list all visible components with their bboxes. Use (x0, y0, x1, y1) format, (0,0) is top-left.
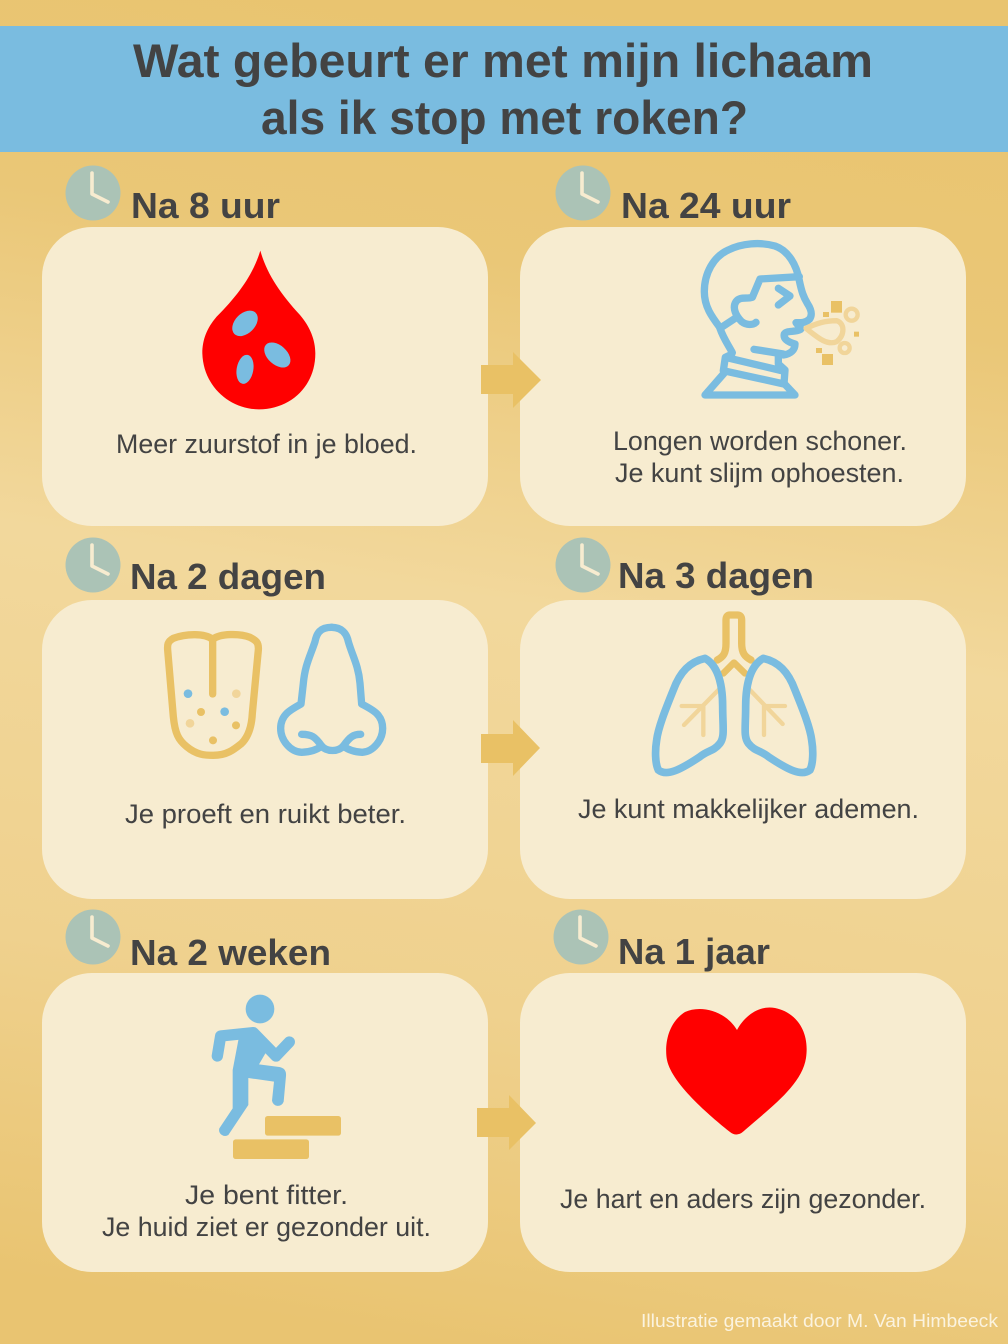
card (42, 227, 488, 526)
icon: head coughing (704, 244, 859, 395)
clock icon (66, 538, 120, 592)
panel: na 2 dagen (42, 538, 488, 899)
text: Meer zuurstof in je bloed. (116, 429, 417, 459)
text (613, 426, 907, 488)
heading: Na 2 weken (130, 932, 331, 973)
card (520, 600, 966, 899)
panel: na 8 uur (42, 166, 488, 526)
text: Je proeft en ruikt beter. (125, 799, 406, 829)
clock icon (66, 166, 120, 220)
title banner (0, 26, 1008, 152)
card (42, 600, 488, 899)
text: Je bent fitter. (185, 1180, 348, 1210)
card (520, 973, 966, 1272)
text: Je kunt slijm ophoesten. (615, 458, 904, 488)
panel: na 3 dagen (520, 538, 966, 899)
heading: Na 24 uur (621, 185, 791, 226)
arrow 2 (481, 720, 540, 776)
panel: na 24 uur (520, 166, 966, 526)
card (520, 227, 966, 526)
text: Je kunt makkelijker ademen. (578, 794, 919, 824)
arrow 3 (477, 1095, 536, 1150)
panel: na 2 weken (42, 910, 488, 1272)
icon: tongue (168, 635, 258, 755)
panel: na 1 jaar (520, 910, 966, 1272)
clock icon (66, 910, 120, 964)
title banner: Wat gebeurt er met mijn lichaam (133, 34, 873, 87)
heading: Na 1 jaar (618, 931, 770, 972)
icon: heart (666, 1007, 807, 1134)
card (42, 973, 488, 1272)
text (102, 1180, 431, 1242)
text: Longen worden schoner. (613, 426, 907, 456)
icon: blood drop (202, 251, 315, 409)
arrow 1 (481, 352, 541, 408)
heading: Na 2 dagen (130, 556, 326, 597)
clock icon (556, 166, 610, 220)
text: Je hart en aders zijn gezonder. (560, 1184, 926, 1214)
heading: Na 8 uur (131, 185, 280, 226)
icon: nose (281, 627, 383, 752)
icon: person climbing stairs (217, 995, 341, 1159)
text: Je huid ziet er gezonder uit. (102, 1212, 431, 1242)
footer credit: Illustratie gemaakt door M. Van Himbeeck (641, 1311, 999, 1331)
title banner: als ik stop met roken? (261, 91, 748, 144)
icon: lungs (656, 615, 813, 773)
clock icon (554, 910, 608, 964)
heading: Na 3 dagen (618, 555, 814, 596)
clock icon (556, 538, 610, 592)
